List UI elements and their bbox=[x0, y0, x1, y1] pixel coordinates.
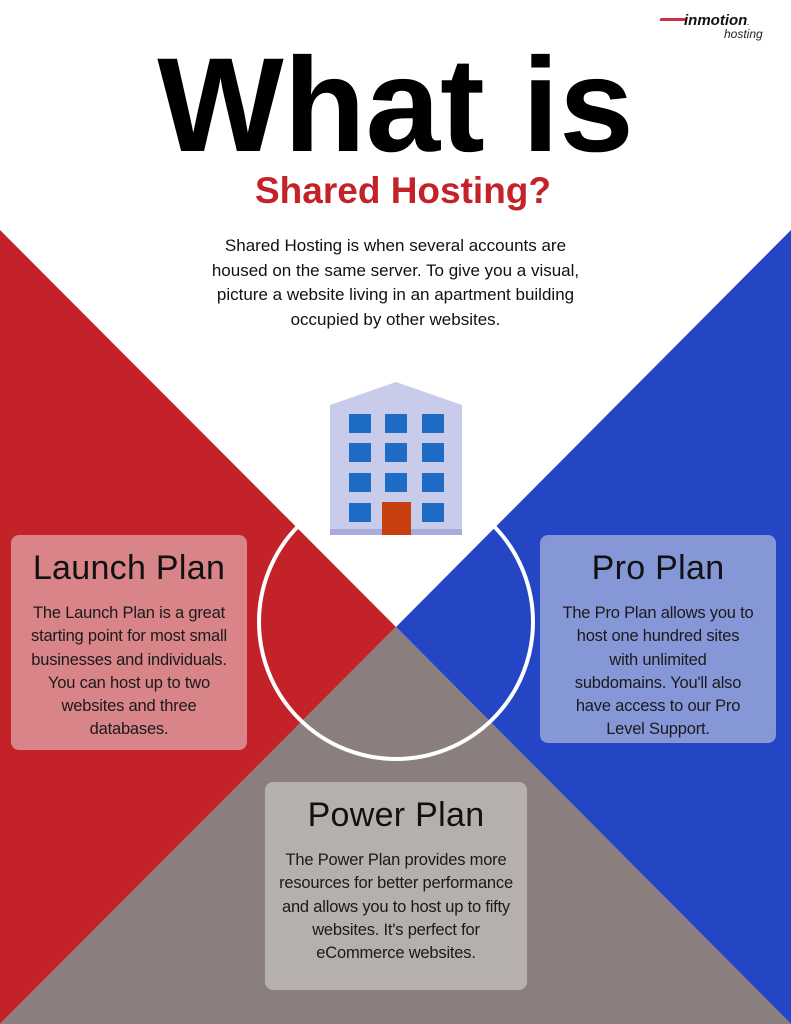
panel: power plan: The Power Plan provides more bbox=[286, 851, 506, 869]
panel: pro plan: Level Support. bbox=[606, 720, 710, 738]
gray region bbox=[0, 627, 791, 1024]
panel: pro plan: with unlimited bbox=[609, 651, 707, 669]
panel: pro plan: have access to our Pro bbox=[576, 697, 740, 715]
logo: inmotion. bbox=[684, 12, 749, 29]
panel: power plan: and allows you to host up to fifty bbox=[282, 898, 510, 916]
panel: pro plan: subdomains. You'll also bbox=[575, 674, 741, 692]
intro text: Shared Hosting is when several accounts are bbox=[225, 236, 566, 255]
panel: launch plan bbox=[11, 535, 247, 750]
panel: launch plan: businesses and individuals. bbox=[31, 651, 227, 669]
red region bbox=[0, 230, 396, 1024]
panel: pro plan bbox=[540, 535, 776, 743]
panel: power plan: eCommerce websites. bbox=[316, 944, 476, 962]
intro text bbox=[212, 236, 579, 329]
panel: pro plan: Pro Plan bbox=[592, 549, 724, 587]
panel: power plan: websites. It's perfect for bbox=[312, 921, 480, 939]
circle ring bbox=[259, 485, 533, 759]
panel: launch plan: starting point for most small bbox=[31, 627, 227, 645]
icon: building bbox=[330, 382, 462, 535]
intro text: occupied by other websites. bbox=[291, 310, 500, 329]
panel: power plan: Power Plan bbox=[308, 796, 484, 834]
blue region bbox=[396, 230, 791, 1024]
panel: launch plan: Launch Plan bbox=[33, 549, 225, 587]
panel: pro plan: The Pro Plan allows you to bbox=[562, 604, 754, 622]
intro text: housed on the same server. To give you a visual, bbox=[212, 261, 579, 280]
panel: power plan bbox=[265, 782, 527, 990]
logo bbox=[660, 12, 763, 41]
panel: pro plan: host one hundred sites bbox=[577, 627, 739, 645]
title: What is bbox=[157, 31, 634, 180]
panel: launch plan: websites and three bbox=[62, 697, 196, 715]
panel: launch plan: You can host up to two bbox=[48, 674, 210, 692]
intro text: picture a website living in an apartment building bbox=[217, 285, 574, 304]
logo: hosting bbox=[724, 27, 763, 41]
panel: launch plan: The Launch Plan is a great bbox=[33, 604, 225, 622]
subtitle: Shared Hosting? bbox=[255, 170, 551, 211]
panel: launch plan: databases. bbox=[90, 720, 168, 738]
panel: power plan: resources for better performance bbox=[279, 874, 513, 892]
